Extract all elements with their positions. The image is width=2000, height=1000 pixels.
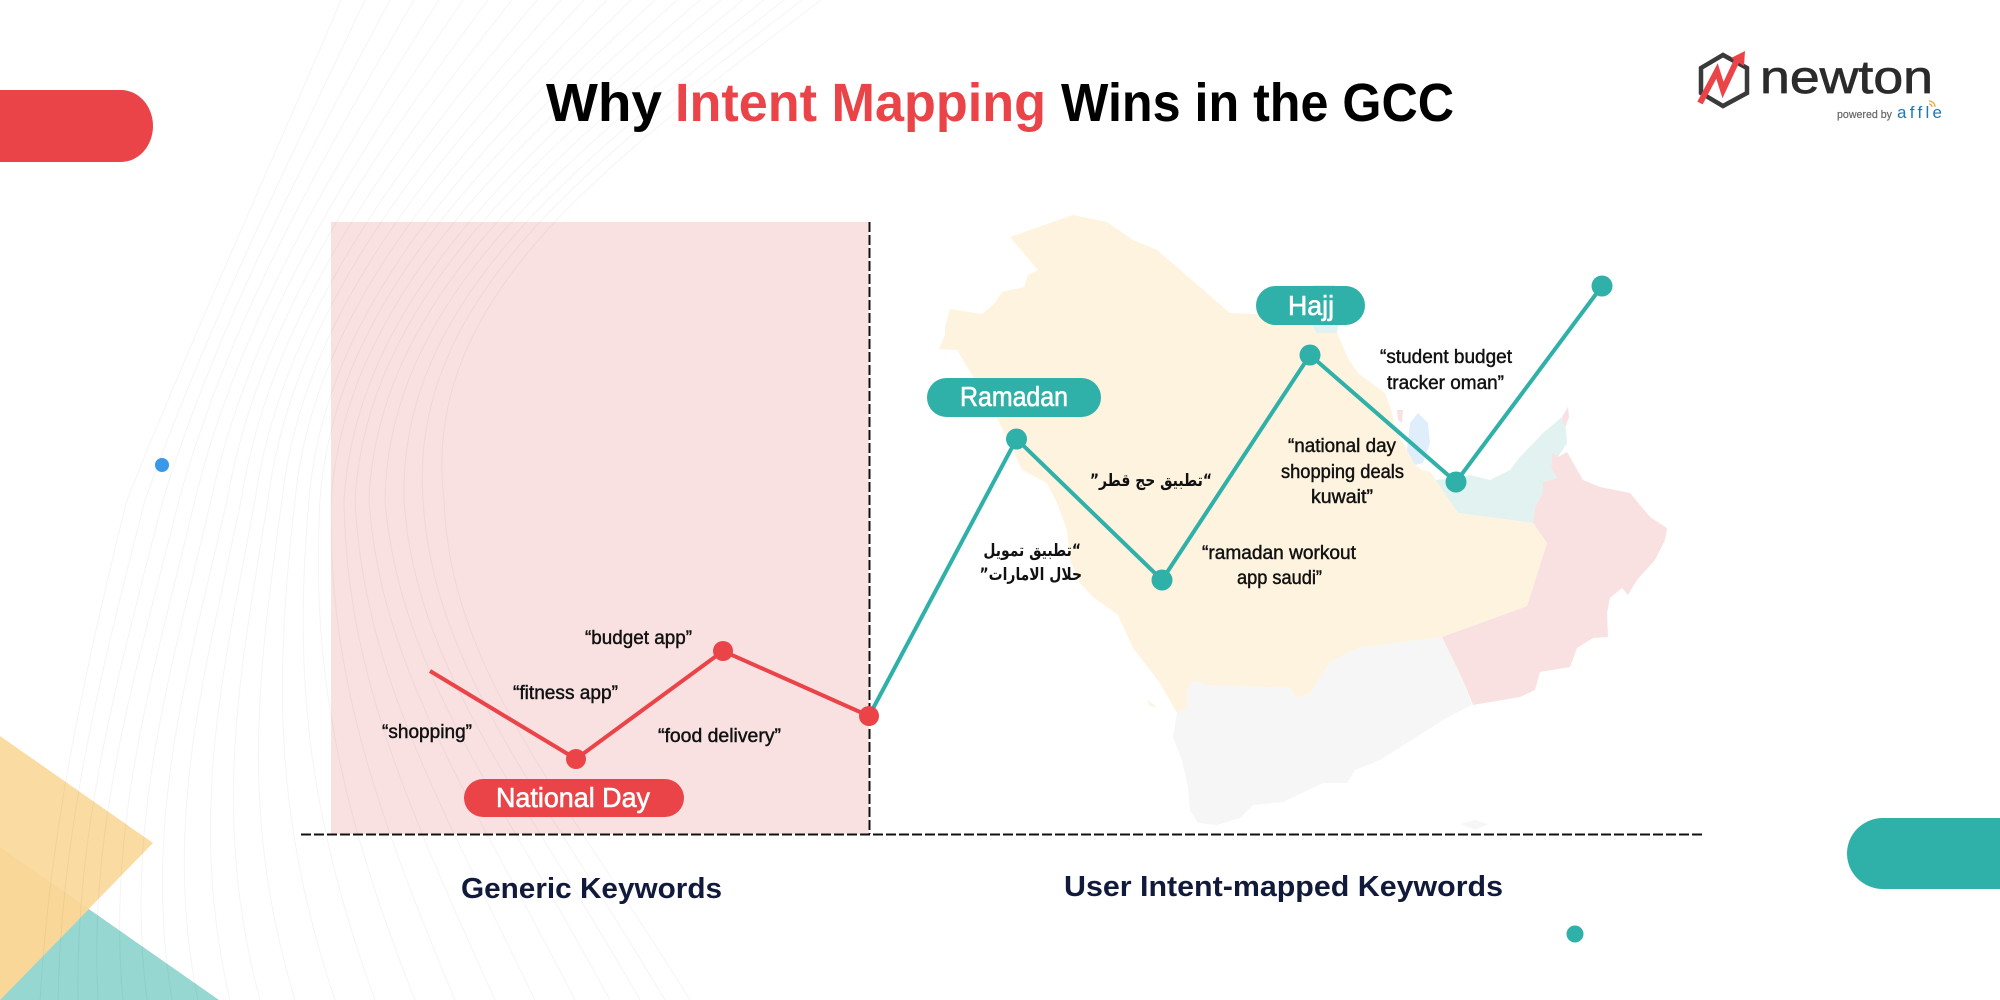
logo: newton powered by affle: powered by [1837, 109, 1892, 121]
logo: newton powered by affle: affle [1897, 103, 1942, 122]
icon: teal pill right [1847, 818, 2000, 889]
icon: affle signal arcs [1929, 101, 1935, 107]
title: Why [546, 73, 662, 133]
label: national day shopping deals kuwait: kuwait” [1311, 486, 1373, 508]
label: shopping: “shopping” [382, 721, 472, 743]
icon: hexagon and rising arrow [1700, 51, 1747, 106]
label: national day shopping deals kuwait [1281, 435, 1404, 508]
icon: teal dot [1566, 926, 1584, 942]
label: ramadan workout app saudi [1202, 542, 1357, 589]
label: Arabic halal finance app UAE: “تطبيق تمويل [983, 541, 1081, 560]
pill: Ramadan [927, 378, 1101, 417]
pill: Ramadan: Ramadan [960, 381, 1068, 412]
title [546, 73, 1454, 133]
label: food delivery: “food delivery” [658, 725, 781, 747]
logo: newton powered by affle: newton [1760, 51, 1933, 103]
heading: Generic Keywords: Generic Keywords [461, 873, 722, 905]
label: student budget tracker oman: “student budget [1380, 346, 1513, 368]
panel: generic keywords shaded area [331, 222, 869, 834]
heading: User Intent-mapped Keywords: User Intent-mapped Keywords [1064, 871, 1503, 903]
label: Arabic halal finance app UAE: حلال الامارات” [980, 565, 1082, 584]
line chart: intent-mapped keywords teal line [869, 276, 1612, 716]
icon: orange and teal corner triangles [0, 736, 219, 1000]
label: budget app: “budget app” [585, 627, 692, 649]
pill: National Day: National Day [496, 782, 650, 813]
pill: Hajj [1256, 286, 1365, 325]
map region: Qatar [1407, 413, 1430, 465]
vertical dashed divider [868, 222, 870, 834]
map region: Bahrain [1397, 410, 1403, 423]
pill: National Day [464, 779, 684, 817]
label: student budget tracker oman: tracker oman” [1387, 372, 1504, 394]
label: national day shopping deals kuwait: “national day [1288, 435, 1396, 457]
map region: Oman [1442, 407, 1667, 705]
horizontal dashed axis [301, 834, 1702, 836]
label: fitness app: “fitness app” [513, 682, 618, 704]
label: Arabic halal finance app UAE [980, 541, 1082, 584]
icon: red pill top left [0, 90, 153, 162]
label: ramadan workout app saudi: “ramadan workout [1202, 542, 1357, 564]
label: national day shopping deals kuwait: shopping deals [1281, 461, 1404, 483]
map region: Saudi Arabia [939, 215, 1547, 713]
label: ramadan workout app saudi: app saudi” [1237, 567, 1322, 589]
map region: Kuwait [1308, 285, 1339, 333]
title: Intent Mapping [675, 73, 1046, 133]
map region: Yemen [1173, 637, 1488, 830]
label: Arabic Hajj app Qatar: “تطبيق حج قطر” [1090, 471, 1212, 490]
line chart: generic keywords red line [430, 641, 869, 769]
title: Wins in the GCC [1061, 73, 1454, 133]
junction dot [859, 706, 879, 726]
logo: newton powered by affle [1700, 51, 1942, 122]
map: GCC countries [939, 215, 1667, 830]
pill: Hajj: Hajj [1288, 290, 1334, 321]
map region: UAE [1430, 417, 1567, 523]
icon: blue dot [155, 458, 169, 472]
label: student budget tracker oman [1380, 346, 1513, 394]
